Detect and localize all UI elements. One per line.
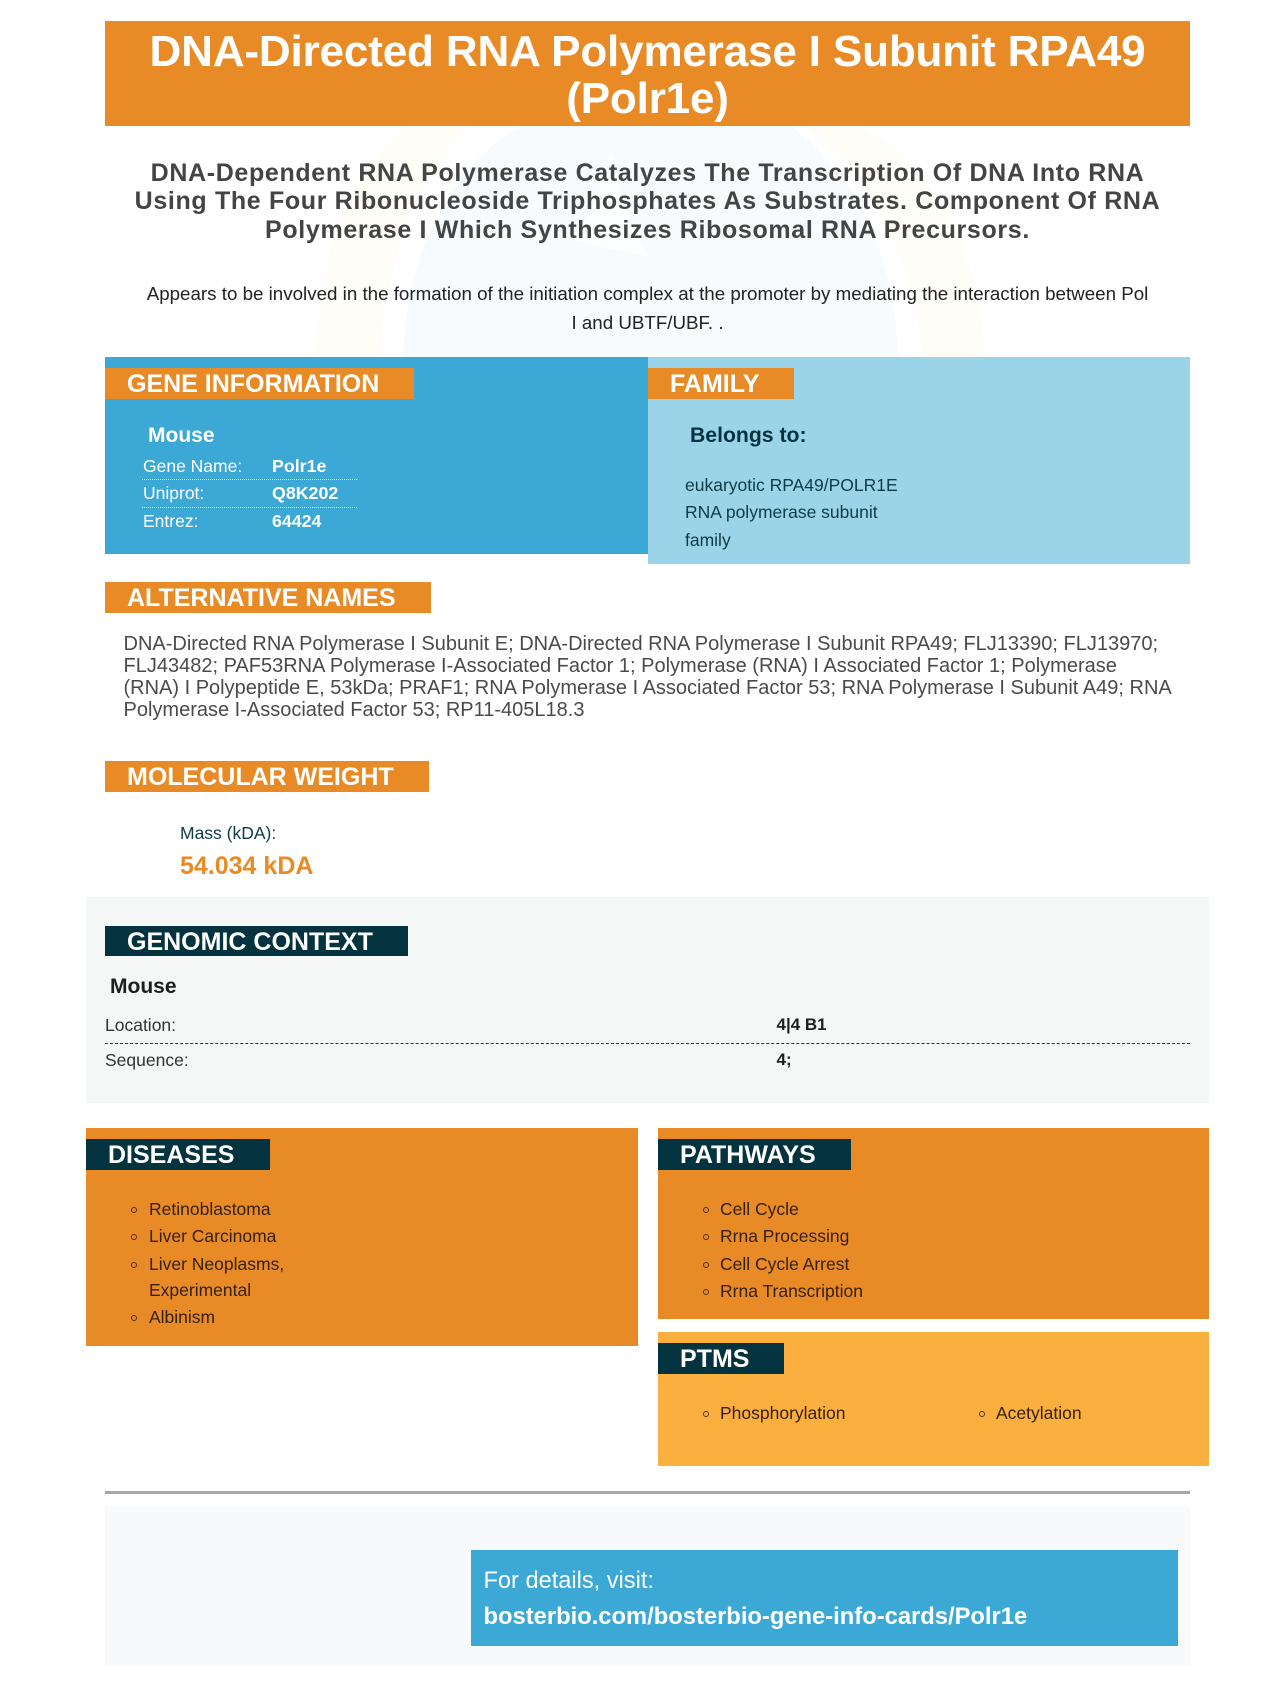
ptm list — [703, 1403, 1082, 1423]
description text: Appears to be involved in the formation of the initiation complex at the promoter by mediating the interaction between Pol — [147, 283, 1148, 304]
alternative names text: (RNA) I Polypeptide E, 53kDa; PRAF1; RNA Polymerase I Associated Factor 53; RNA Polymerase I Subunit A49; RNA — [124, 677, 1172, 699]
family description — [685, 475, 898, 550]
gene info rows: Polr1e — [272, 456, 326, 476]
gene info rows: Uniprot: — [143, 483, 204, 503]
title text: DNA-Directed RNA Polymerase I Subunit RPA49 — [150, 27, 1146, 76]
heading: diseases: DISEASES — [108, 1141, 234, 1169]
subtitle: function summary — [135, 158, 1160, 244]
location row: 4|4 B1 — [776, 1015, 827, 1034]
heading: ptms — [658, 1343, 784, 1374]
gene info rows — [142, 456, 357, 531]
heading: ptms: PTMS — [680, 1345, 749, 1373]
subtitle: function summary: Using The Four Ribonucleoside Triphosphates As Substrates. Component Of RNA — [135, 187, 1160, 215]
family description: family — [685, 530, 731, 550]
location row — [105, 1015, 827, 1035]
disease list: Retinoblastoma — [149, 1199, 271, 1219]
gene info rows: 64424 — [272, 511, 321, 531]
description text — [146, 283, 1148, 333]
location row: Location: — [105, 1015, 176, 1035]
heading: family — [648, 368, 794, 399]
callout: details link — [471, 1550, 1178, 1646]
molecular weight value — [180, 823, 313, 880]
pathway list: Cell Cycle — [720, 1199, 799, 1219]
title text: (Polr1e) — [566, 74, 729, 123]
subtitle: function summary: DNA-Dependent RNA Polymerase Catalyzes The Transcription Of DNA Into RNA — [151, 158, 1144, 186]
alternative names text: FLJ43482; PAF53RNA Polymerase I-Associated Factor 1; Polymerase (RNA) I Associated Factor 1; Polymerase — [124, 655, 1117, 677]
heading: pathways — [658, 1139, 851, 1170]
disease list: Liver Neoplasms, — [149, 1254, 284, 1274]
alternative names text: Polymerase I-Associated Factor 53; RP11-405L18.3 — [124, 699, 584, 721]
pathway list: Rrna Processing — [720, 1226, 849, 1246]
description text: I and UBTF/UBF. . — [571, 312, 724, 333]
heading: molecular weight: MOLECULAR WEIGHT — [127, 763, 394, 791]
alternative names text — [124, 633, 1172, 721]
heading: genomic context: GENOMIC CONTEXT — [127, 928, 373, 956]
pathway list: Cell Cycle Arrest — [720, 1254, 849, 1274]
sequence row: Sequence: — [105, 1050, 189, 1070]
panel: genomic context — [86, 897, 1209, 1103]
belongs to label: Belongs to: — [690, 424, 807, 447]
title banner — [105, 21, 1190, 126]
species label: Mouse — [148, 424, 215, 447]
alternative names text: DNA-Directed RNA Polymerase I Subunit E; DNA-Directed RNA Polymerase I Subunit RPA49; FLJ13390; FLJ13970; — [124, 633, 1158, 655]
sequence row: 4; — [776, 1050, 792, 1069]
disease list — [131, 1199, 284, 1327]
heading: family: FAMILY — [670, 370, 759, 398]
callout label: For details, visit: — [484, 1568, 654, 1594]
mass value: 54.034 kDA — [180, 852, 313, 880]
species label: Mouse — [110, 975, 177, 998]
ptm list: Phosphorylation — [720, 1403, 846, 1423]
disease list: Liver Carcinoma — [149, 1226, 276, 1246]
background watermark logo — [0, 0, 1288, 360]
heading: pathways: PATHWAYS — [680, 1141, 816, 1169]
subtitle: function summary: Polymerase I Which Synthesizes Ribosomal RNA Precursors. — [265, 216, 1030, 244]
gene info rows: Entrez: — [143, 511, 198, 531]
pathway list — [703, 1199, 863, 1301]
mass label: Mass (kDA): — [180, 823, 276, 843]
panel: family — [648, 357, 1190, 564]
heading: alternative names: ALTERNATIVE NAMES — [127, 584, 396, 612]
family description: eukaryotic RPA49/POLR1E — [685, 475, 898, 495]
panel: diseases — [86, 1128, 638, 1346]
callout url: bosterbio.com/bosterbio-gene-info-cards/Polr1e — [484, 1603, 1027, 1630]
ptm list: Acetylation — [996, 1403, 1082, 1423]
panel: pathways — [658, 1128, 1209, 1319]
gene info rows: Gene Name: — [143, 456, 242, 476]
pathway list: Rrna Transcription — [720, 1281, 863, 1301]
panel: gene information — [105, 357, 648, 554]
panel: ptms — [658, 1332, 1209, 1466]
title text — [150, 27, 1146, 123]
sequence row — [105, 1050, 792, 1070]
heading: diseases — [86, 1139, 270, 1170]
gene info rows: Q8K202 — [272, 483, 338, 503]
panel: footer — [105, 1506, 1190, 1665]
family description: RNA polymerase subunit — [685, 502, 878, 522]
heading: gene information: GENE INFORMATION — [127, 370, 379, 398]
disease list: Albinism — [149, 1307, 215, 1327]
disease list: Experimental — [149, 1280, 251, 1300]
